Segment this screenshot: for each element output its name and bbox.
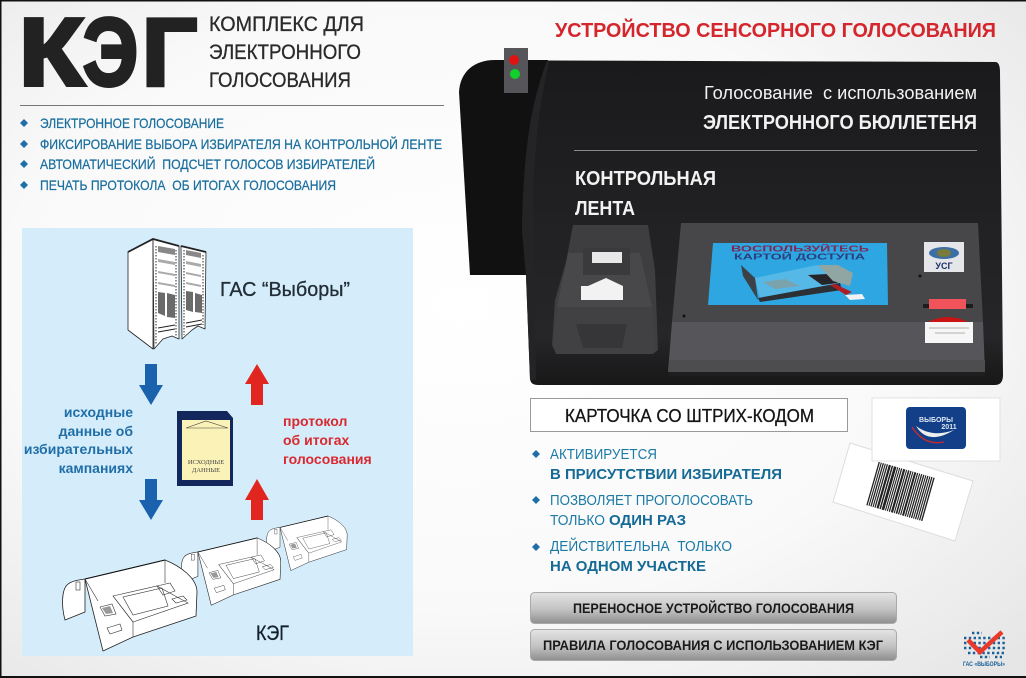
subtitle [209,13,364,92]
text: input data: избирательных [24,441,133,457]
icon: large KEG machine [63,560,197,651]
badge: УСГ [924,242,964,272]
text: protocol: об итогах [283,432,350,448]
button: rules [530,630,896,660]
card back with barcode [833,443,973,541]
indicator lamp [504,48,528,93]
text: input data: данные об [59,423,133,439]
card facts list: ДЕЙСТВИТЕЛЬНА ТОЛЬКО [550,537,732,555]
button: portable device: ПЕРЕНОСНОЕ УСТРОЙСТВО ГОЛОСОВАНИЯ [573,599,854,616]
white card with logo [872,398,1000,461]
button: portable device [530,592,896,624]
card facts list: ТОЛЬКО [550,512,605,529]
label: КЭГ: КЭГ [256,622,289,645]
feature list [20,115,442,193]
icon: server racks [128,239,206,349]
card facts list: В ПРИСУТСТВИИ ИЗБИРАТЕЛЯ [550,466,782,483]
subtitle: ГОЛОСОВАНИЯ [209,69,351,92]
text: protocol: голосования [283,451,372,467]
feature list: ЭЛЕКТРОННОЕ ГОЛОСОВАНИЕ [40,115,224,131]
card facts list: АКТИВИРУЕТСЯ [550,446,657,463]
text: input data [24,404,133,476]
arrow: up bottom [245,479,269,520]
subtitle: ЭЛЕКТРОННОГО [209,41,361,64]
title: КЭГ logotype: Г [142,0,197,106]
printer [552,225,658,354]
screen [708,243,888,305]
card facts list: НА ОДНОМ УЧАСТКЕ [550,558,706,575]
text: input data: исходные [64,404,133,420]
text: electronic ballot: ЭЛЕКТРОННОГО БЮЛЛЕТЕНЯ [703,112,977,134]
logo: ГАС Выборы [963,632,1006,668]
white card with logo: 2011 [941,424,957,431]
logo: ГАС Выборы: ГАС «ВЫБОРЫ» [963,662,1006,668]
white card with logo: ВЫБОРЫ [919,417,953,424]
arrow: up top [245,364,269,405]
icon: SD card [177,411,233,486]
heading: touch device: УСТРОЙСТВО СЕНСОРНОГО ГОЛОСОВАНИЯ [555,18,996,42]
badge: УСГ: УСГ [935,261,953,271]
box: barcode card heading: КАРТОЧКА СО ШТРИХ-КОДОМ [565,405,814,426]
feature list: АВТОМАТИЧЕСКИЙ ПОДСЧЕТ ГОЛОСОВ ИЗБИРАТЕЛЕЙ [40,155,375,172]
text: control tape: ЛЕНТА [575,198,635,220]
icon: small KEG machine [267,516,347,571]
card facts list: ПОЗВОЛЯЕТ ПРОГОЛОСОВАТЬ [550,492,753,509]
screen: КАРТОЙ ДОСТУПА [734,252,865,262]
terminal [668,223,985,376]
screen: ВОСПОЛЬЗУЙТЕСЬ [731,244,869,254]
sticker [925,317,973,343]
text: input data: кампаниях [59,460,133,476]
text: control tape [575,168,716,220]
subtitle: КОМПЛЕКС ДЛЯ [209,13,364,36]
card facts list: ОДИН РАЗ [609,512,686,529]
icon: medium KEG machine [181,538,281,605]
text: electronic ballot [703,83,977,134]
icon: SD card: ДАННЫЕ [192,467,220,474]
text: protocol [283,413,372,467]
arrow: down bottom [139,479,163,520]
card facts list [532,446,782,575]
title: КЭГ logotype: К [19,0,84,106]
title: КЭГ logotype [19,0,197,106]
title: КЭГ logotype: Э [83,0,138,106]
text: electronic ballot: Голосование с использованием [704,83,977,103]
panel: data flow [22,228,413,656]
text: protocol: протокол [283,413,347,429]
feature list: ФИКСИРОВАНИЕ ВЫБОРА ИЗБИРАТЕЛЯ НА КОНТРОЛЬНОЙ ЛЕНТЕ [40,135,442,152]
button: rules: ПРАВИЛА ГОЛОСОВАНИЯ С ИСПОЛЬЗОВАНИЕМ КЭГ [543,637,883,653]
box: barcode card heading [530,398,848,432]
card reader slot [923,299,973,309]
icon: SD card: ИСХОДНЫЕ [188,459,224,466]
text: control tape: КОНТРОЛЬНАЯ [575,168,716,190]
device: black housing [459,48,1003,385]
feature list: ПЕЧАТЬ ПРОТОКОЛА ОБ ИТОГАХ ГОЛОСОВАНИЯ [40,177,336,193]
arrow: down top [139,364,163,405]
label: ГАС Выборы: ГАС “Выборы” [220,279,350,301]
barcode [872,484,928,500]
